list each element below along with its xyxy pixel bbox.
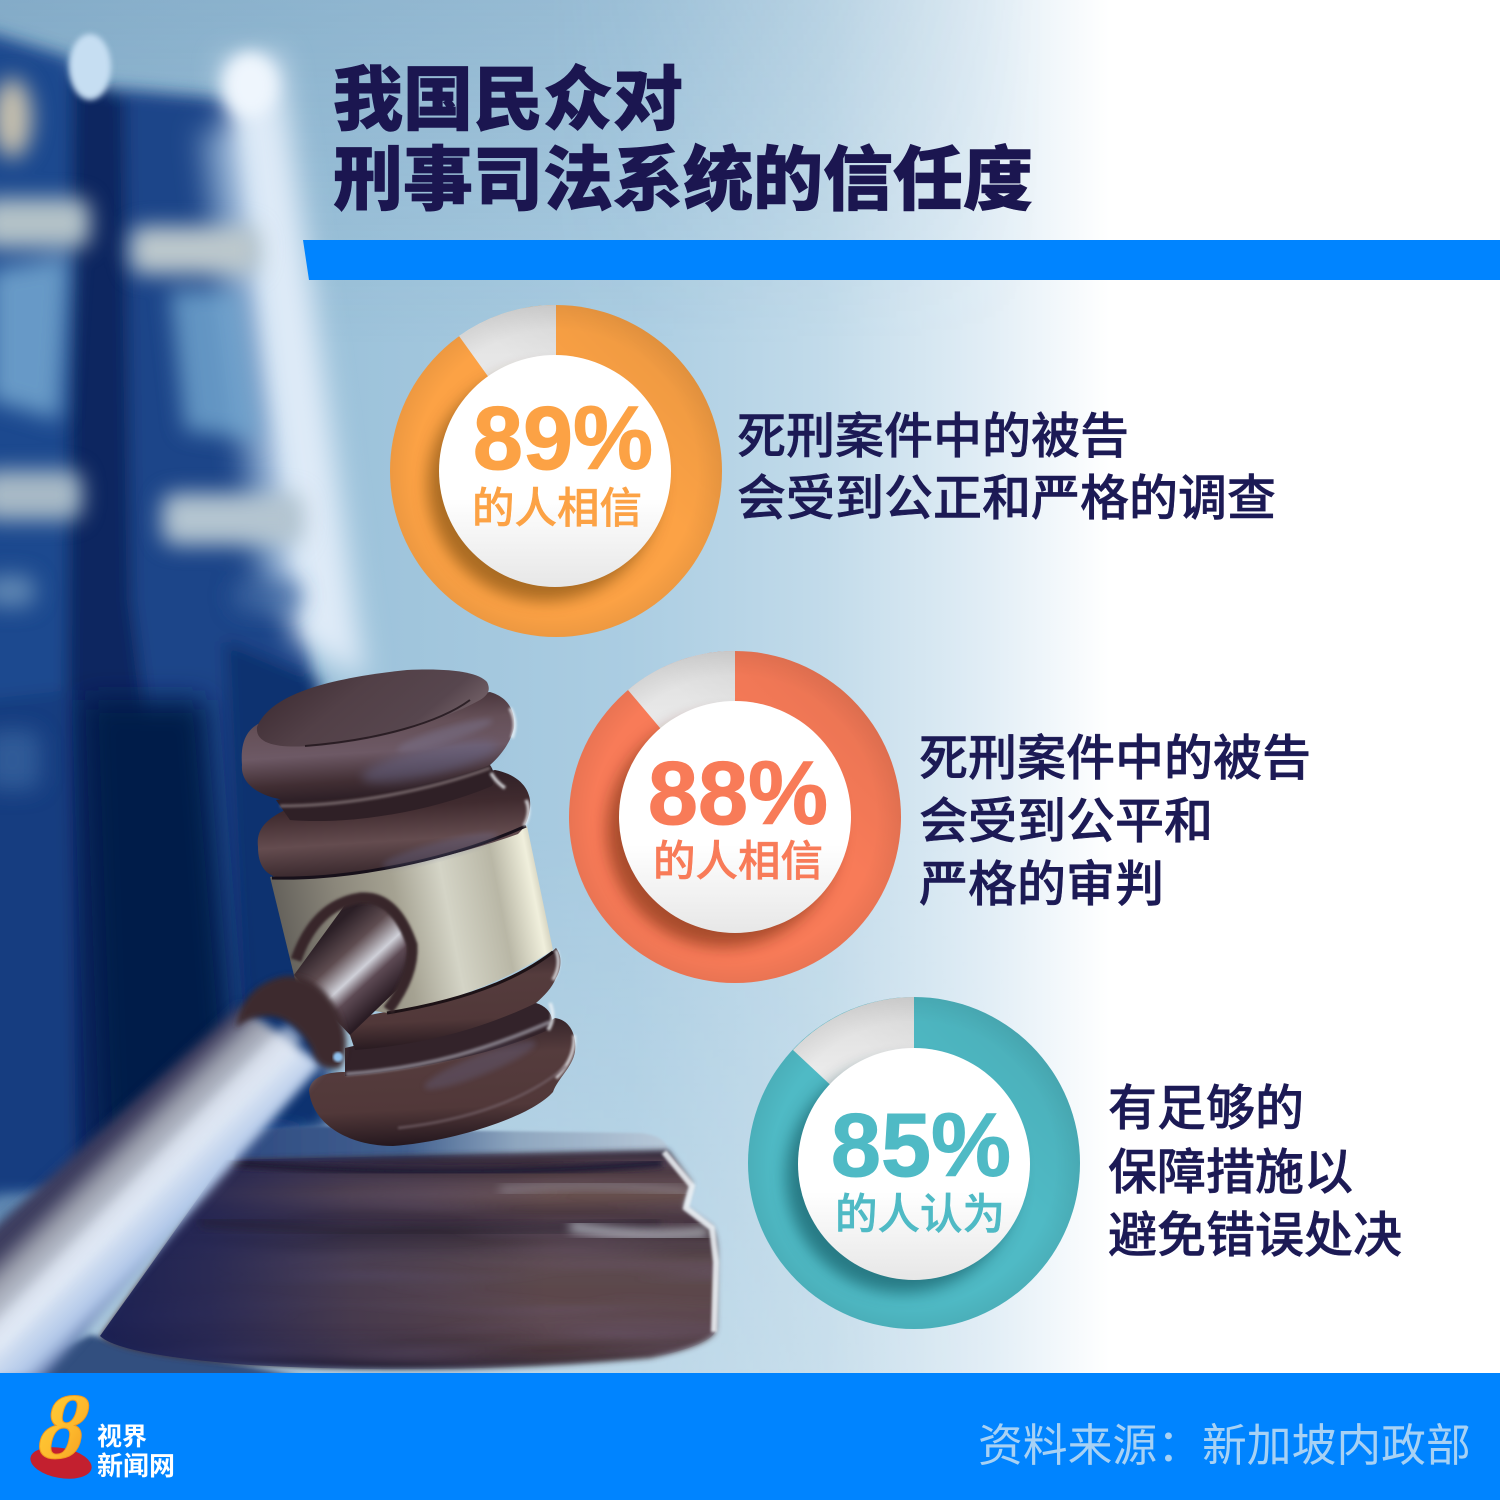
text: safeguards statement: 避免错误处决 [1108, 1209, 1402, 1263]
title: 刑事司法系统的信任度 [333, 141, 1033, 219]
88% figure: 88% [648, 744, 828, 844]
的人相信 label: 的人相信 [472, 486, 642, 533]
block top face [232, 1127, 668, 1168]
lower disc [309, 1018, 575, 1146]
panel: 89% investigation donut [390, 305, 722, 637]
text: trial statement: 严格的审判 [919, 858, 1164, 912]
gavel sounding block [80, 1127, 730, 1380]
text: safeguards statement [1108, 1082, 1402, 1263]
panel: 85% safeguards donut [748, 997, 1080, 1329]
gavel head [242, 670, 575, 1146]
block body [100, 1150, 717, 1369]
logo wordmark [97, 1423, 175, 1481]
icon: gold 8: 8 [33, 1375, 95, 1479]
handle ferrule [236, 976, 346, 1069]
icon: red disc [28, 1443, 94, 1483]
upper collar [258, 770, 530, 878]
lower collar [345, 948, 560, 1050]
source note: 资料来源：新加坡内政部 [978, 1421, 1471, 1471]
logo: 8视界新闻网 [28, 1375, 175, 1483]
lower ring [345, 1003, 552, 1076]
footer bar [0, 1373, 1500, 1500]
text: safeguards statement: 保障措施以 [1108, 1146, 1353, 1200]
text: investigation statement: 会受到公正和严格的调查 [737, 472, 1276, 526]
upper neck [276, 765, 494, 821]
title: 我国民众对 [333, 61, 683, 139]
89% figure: 89% [473, 389, 653, 489]
gavel handle [0, 898, 414, 1380]
blurred law books [0, 30, 365, 1385]
text: trial statement [919, 732, 1311, 912]
background gradient [0, 0, 1076, 1373]
logo wordmark: 视界 [97, 1423, 147, 1451]
text: trial statement: 会受到公平和 [919, 795, 1213, 849]
85% figure: 85% [831, 1096, 1011, 1196]
的人认为 label: 的人认为 [835, 1192, 1005, 1239]
的人相信 label: 的人相信 [653, 839, 823, 886]
text: safeguards statement: 有足够的 [1108, 1082, 1304, 1136]
text: trial statement: 死刑案件中的被告 [919, 732, 1311, 786]
title [333, 61, 1033, 219]
panel: 88% trial donut [569, 651, 901, 983]
text: investigation statement: 死刑案件中的被告 [737, 410, 1129, 464]
top cap face [257, 670, 489, 747]
text: investigation statement [737, 410, 1276, 526]
blue title bar [303, 240, 1500, 280]
silver band [270, 826, 553, 1013]
logo wordmark: 新闻网 [97, 1451, 175, 1481]
handle neck [294, 900, 414, 1035]
top cap rim [242, 692, 514, 800]
